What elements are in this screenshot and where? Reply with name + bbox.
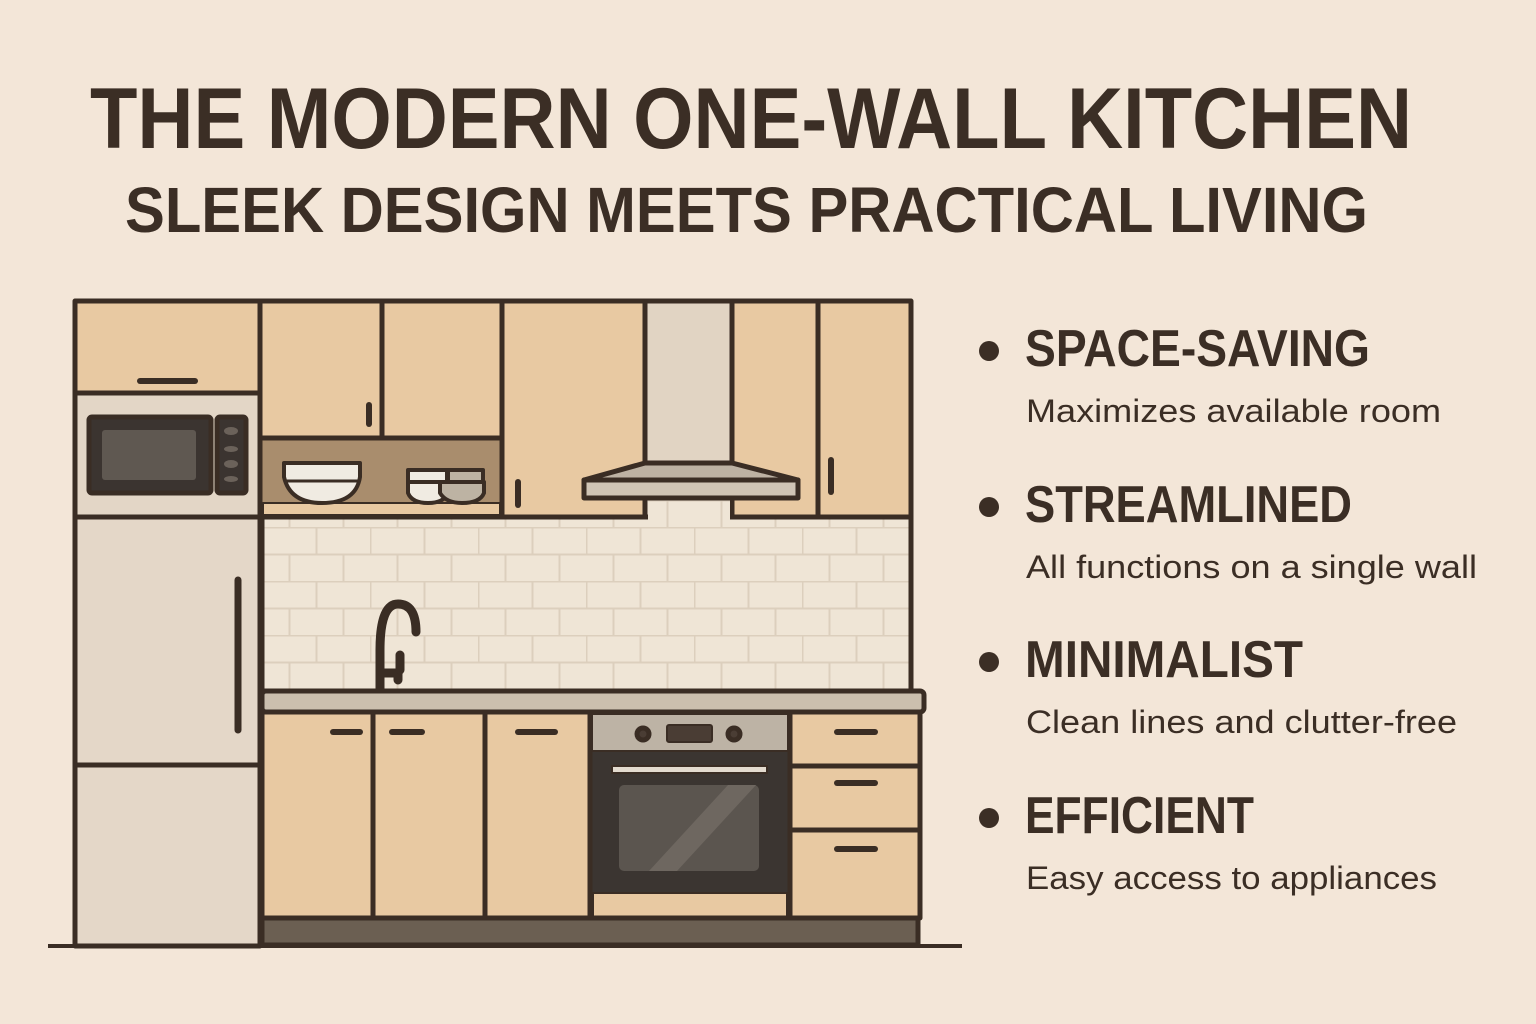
backsplash tiles [262,496,911,691]
upper cabinets [260,301,502,438]
countertop [262,691,924,712]
feature: streamlined: STREAMLINED [1025,476,1352,534]
faucet [380,604,416,690]
feature: efficient [979,787,1437,896]
microwave [75,393,260,517]
feature: streamlined [979,476,1477,585]
feature: efficient: Easy access to appliances [1026,860,1437,896]
feature: minimalist: Clean lines and clutter-free [1026,704,1457,740]
left tall column: top cabinet [75,301,260,393]
oven [590,712,790,918]
drawers [790,712,920,918]
feature list [979,320,1477,896]
subtitle: SLEEK DESIGN MEETS PRACTICAL LIVING [125,174,1368,246]
feature: space-saving [979,320,1441,429]
title: THE MODERN ONE-WALL KITCHEN [90,71,1412,167]
range hood [584,301,798,498]
floor line [48,944,962,948]
feature: streamlined: All functions on a single wall [1026,549,1477,585]
cabinets right of hood [732,301,911,517]
feature: space-saving: Maximizes available room [1026,393,1441,429]
cabinet left of hood [502,301,645,517]
open shelf with bowls [260,438,502,518]
refrigerator [75,517,260,946]
plinth [262,918,918,945]
feature: minimalist: MINIMALIST [1025,631,1303,689]
kitchen illustration [48,301,962,946]
feature: space-saving: SPACE-SAVING [1025,320,1370,378]
base cabinets [262,712,590,918]
feature: minimalist [979,631,1457,740]
feature: efficient: EFFICIENT [1025,787,1254,845]
